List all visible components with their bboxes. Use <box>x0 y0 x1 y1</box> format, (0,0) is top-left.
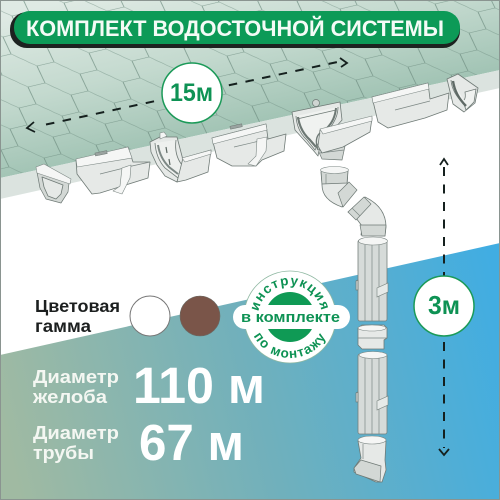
title banner: КОМПЛЕКТ ВОДОСТОЧНОЙ СИСТЕМЫ <box>26 16 444 41</box>
label: gutter diameter: Диаметр <box>33 366 119 387</box>
downpipe coupling <box>358 325 387 349</box>
gutter section 3 <box>372 83 449 128</box>
gutter end cap right <box>447 74 478 112</box>
blue-green gradient background <box>0 243 500 500</box>
label: pipe diameter: трубы <box>33 442 94 463</box>
value: pipe diameter: 67 м <box>139 414 244 471</box>
badge: instructions included: в комплекте <box>241 310 340 326</box>
callout: 3m <box>414 276 474 336</box>
badge: instructions included <box>233 270 350 364</box>
color range label <box>35 296 120 336</box>
callout: 15m: 15м <box>170 79 213 107</box>
downpipe upper section <box>356 237 388 321</box>
callout: 15m <box>162 63 222 123</box>
downpipe elbow upper <box>320 166 357 207</box>
color range label: Цветовая <box>35 296 120 316</box>
downpipe outlet spout <box>354 436 386 482</box>
callout: 3m: 3м <box>428 290 460 320</box>
gutter section 2 <box>212 124 286 166</box>
title banner <box>10 11 460 48</box>
label: pipe diameter: Диаметр <box>33 422 119 443</box>
swatch: brown <box>180 296 220 336</box>
gutter funnel outlet <box>292 100 372 160</box>
dashed arrow: 15 m width <box>27 58 347 132</box>
swatch: white <box>130 296 170 336</box>
roof with hexagonal shingles <box>0 0 500 199</box>
gutter end cap left <box>36 164 71 203</box>
badge: instructions included: инструкция <box>252 278 328 311</box>
value: gutter diameter: 110 м <box>133 357 265 414</box>
downpipe lower section <box>356 352 388 434</box>
label: pipe diameter <box>33 422 119 463</box>
dashed arrow: 3 m height <box>439 159 449 455</box>
badge: instructions included: по монтажу <box>254 332 326 358</box>
label: gutter diameter <box>32 366 119 407</box>
label: gutter diameter: желоба <box>32 386 108 407</box>
gutter section 1 <box>76 147 150 194</box>
gutter connector <box>150 132 211 182</box>
downpipe elbow lower <box>348 197 386 236</box>
color range label: гамма <box>35 316 91 336</box>
